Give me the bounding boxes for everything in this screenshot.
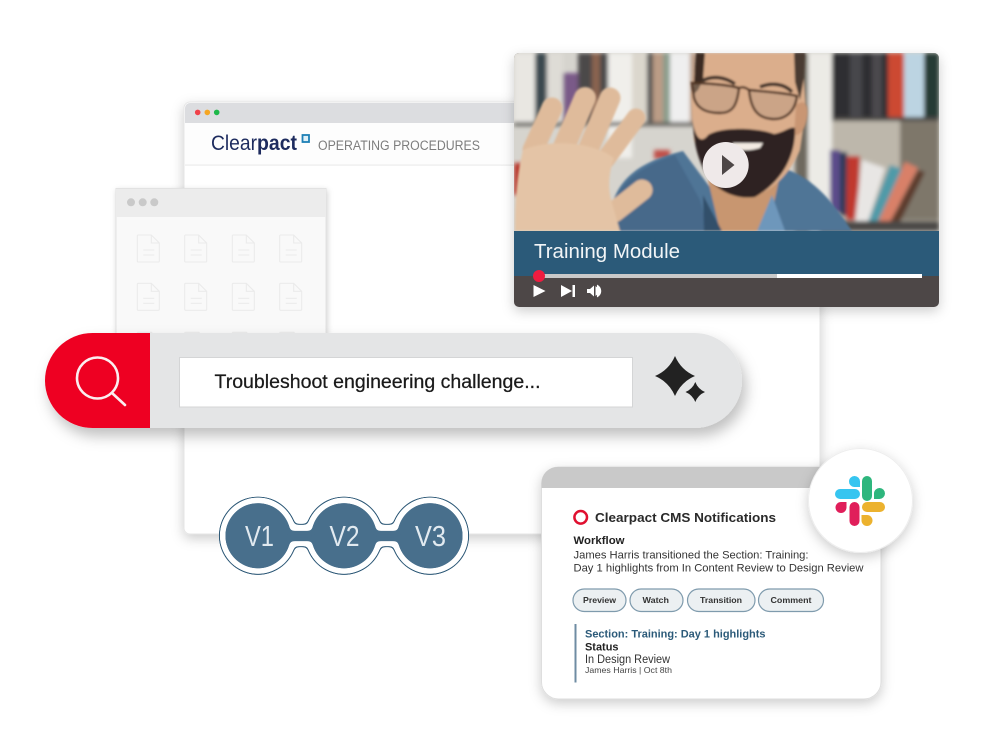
workflow message	[574, 535, 864, 574]
action buttons: Watch	[642, 595, 669, 605]
icon: magnifier	[77, 358, 125, 405]
header label: OPERATING PROCEDURES	[318, 138, 480, 153]
neck	[708, 175, 780, 231]
panel: training video player	[514, 53, 939, 307]
progress bar	[533, 270, 922, 282]
icon: play	[534, 285, 546, 297]
workflow message: Workflow	[574, 535, 625, 547]
status block: Status	[585, 641, 618, 653]
version chain V1 V2 V3: V2	[330, 521, 360, 553]
library window dots	[127, 198, 158, 206]
beard	[693, 124, 795, 198]
search text: Troubleshoot engineering challenge...	[214, 372, 540, 393]
window title bar	[185, 103, 819, 123]
action buttons: Transition	[700, 595, 742, 605]
shirt	[608, 151, 852, 231]
play button overlay	[703, 142, 749, 188]
icon: next	[561, 285, 575, 297]
eyebrows	[702, 77, 735, 84]
document icons grid	[137, 235, 302, 359]
video title: Training Module	[534, 241, 680, 263]
icon: AI sparkles	[655, 356, 705, 402]
search input	[180, 358, 632, 407]
icon: volume	[587, 285, 601, 297]
action buttons	[573, 589, 824, 612]
title strip	[514, 231, 939, 276]
icon: slack logo badge	[808, 448, 912, 552]
card title: Clearpact CMS Notifications	[595, 510, 776, 525]
status block: Section: Training: Day 1 highlights	[585, 628, 766, 640]
icon: red ring	[574, 511, 587, 524]
video photo: presenter waving	[514, 53, 939, 231]
workflow message: Day 1 highlights from In Content Review to Design Review	[574, 562, 864, 574]
clearpact logo	[211, 132, 309, 155]
head	[691, 53, 806, 197]
window control dots	[195, 110, 220, 115]
workflow message: James Harris transitioned the Section: Training:	[574, 550, 808, 562]
action buttons: Preview	[583, 595, 616, 605]
panel: operating procedures window	[184, 102, 820, 534]
status block: James Harris | Oct 8th	[585, 665, 672, 675]
hand	[533, 98, 642, 212]
version chain V1 V2 V3: V3	[415, 521, 446, 553]
panel: search bar	[45, 333, 742, 428]
card header bar	[542, 467, 881, 488]
status block: In Design Review	[585, 654, 671, 666]
library title bar	[116, 189, 326, 217]
panel: slack notification card	[542, 467, 881, 699]
status block	[574, 624, 766, 682]
clearpact logo: Clear	[211, 132, 257, 155]
red search button	[45, 333, 150, 428]
version chain V1 V2 V3	[219, 497, 469, 575]
glasses	[692, 83, 797, 119]
action buttons: Comment	[770, 595, 812, 605]
clearpact logo: pact	[257, 132, 297, 155]
panel: document library window	[116, 188, 326, 368]
version chain V1 V2 V3: V1	[245, 521, 274, 553]
